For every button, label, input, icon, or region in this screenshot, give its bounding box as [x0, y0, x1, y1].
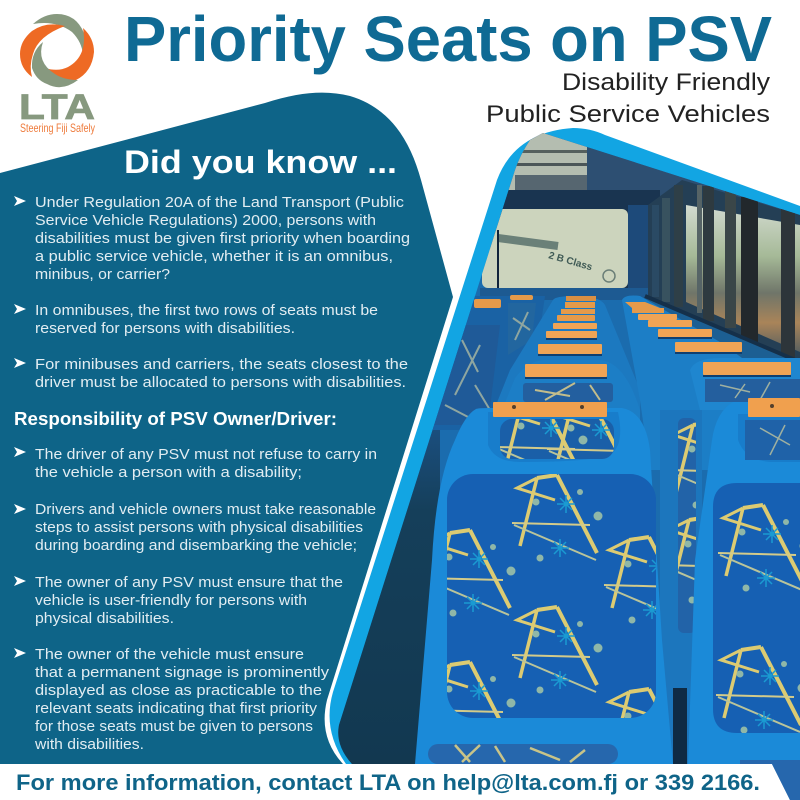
bullet: permanent signage [14, 646, 330, 753]
photo: bus interior with seats [330, 125, 800, 800]
bullet: assist persons [14, 501, 376, 554]
upper rear vent [508, 133, 587, 190]
bullet: regulation 20A: minibus, or carrier? [35, 266, 170, 283]
centre seat rows [497, 296, 640, 420]
bullet: regulation 20A: a public service vehicle, whether it is an omnibus, [35, 248, 393, 265]
rear window: 2 B Class [547, 250, 594, 273]
bullet: regulation 20A [14, 194, 410, 283]
bullet: regulation 20A: Service Vehicle Regulations) 2000, persons with [35, 212, 376, 229]
bullet: assist persons: during boarding and disembarking the vehicle; [35, 537, 357, 554]
bullet: driver must not refuse: the vehicle a person with a disability; [35, 464, 302, 481]
heading: responsibility: Responsibility of PSV Owner/Driver: [14, 409, 337, 429]
bullet: omnibuses: reserved for persons with disabilities. [35, 320, 295, 337]
bullet: driver must not refuse: The driver of any PSV must not refuse to carry in [35, 446, 377, 463]
seat behind, fabric sliver [660, 410, 702, 764]
rear window [482, 209, 628, 288]
bullet: omnibuses: In omnibuses, the first two rows of seats must be [35, 302, 378, 319]
bullet: regulation 20A: Under Regulation 20A of the Land Transport (Public [35, 194, 405, 211]
bullet: permanent signage: for those seats must be given to persons [35, 718, 313, 735]
bullet: minibuses and carriers: For minibuses and carriers, the seats closest to the [35, 356, 408, 373]
bullet: regulation 20A: disabilities must be given first priority when boarding [35, 230, 410, 247]
bullet: minibuses and carriers: driver must be allocated to persons with disabilities. [35, 374, 406, 391]
right seat rows [622, 296, 800, 470]
bullet: permanent signage: displayed as close as practicable to the [35, 682, 322, 699]
bullet: user-friendly: The owner of any PSV must ensure that the [35, 574, 343, 591]
dark floor [330, 425, 440, 770]
logo [19, 14, 95, 135]
bullet: minibuses and carriers [14, 356, 408, 391]
bullet: assist persons: steps to assist persons with physical disabilities [35, 519, 363, 536]
panel: did you know [0, 93, 453, 764]
bullet: permanent signage: The owner of the vehicle must ensure [35, 646, 304, 663]
bullet: permanent signage: that a permanent signage is prominently [35, 664, 330, 681]
logo tagline: Steering Fiji Safely [20, 121, 95, 135]
seat fabric lower [428, 744, 618, 764]
bullet: permanent signage: with disabilities. [34, 736, 144, 753]
ceiling [500, 133, 800, 216]
footer: contact line: For more information, contact LTA on help@lta.com.fj or 339 2166. [16, 770, 760, 795]
subtitle: Public Service Vehicles [486, 101, 770, 128]
left seats [425, 295, 545, 430]
heading: did you know: Did you know ... [124, 144, 397, 180]
icon: LTA swirl [20, 14, 94, 87]
bullet: permanent signage: relevant seats indicating that first priority [35, 700, 318, 717]
front seat shell right [688, 398, 800, 800]
logo wordmark: LTA [19, 88, 95, 127]
front seat shell left [415, 402, 673, 764]
bullet: user-friendly: vehicle is user-friendly for persons with [35, 592, 307, 609]
subtitle: Disability Friendly [562, 69, 771, 96]
light blue photo frame [330, 128, 800, 764]
headrest bar left [493, 402, 607, 417]
seat fabric main [447, 474, 656, 718]
subtitle [486, 69, 771, 128]
bullet: user-friendly: physical disabilities. [35, 610, 174, 627]
bullet: user-friendly [14, 574, 343, 627]
bullet: omnibuses [14, 302, 378, 337]
seat fabric upper [500, 419, 614, 459]
bullet: assist persons: Drivers and vehicle owners must take reasonable [35, 501, 376, 518]
side windows [648, 180, 800, 365]
title: Priority Seats on PSV [124, 3, 772, 75]
bullet: driver must not refuse [14, 446, 377, 481]
